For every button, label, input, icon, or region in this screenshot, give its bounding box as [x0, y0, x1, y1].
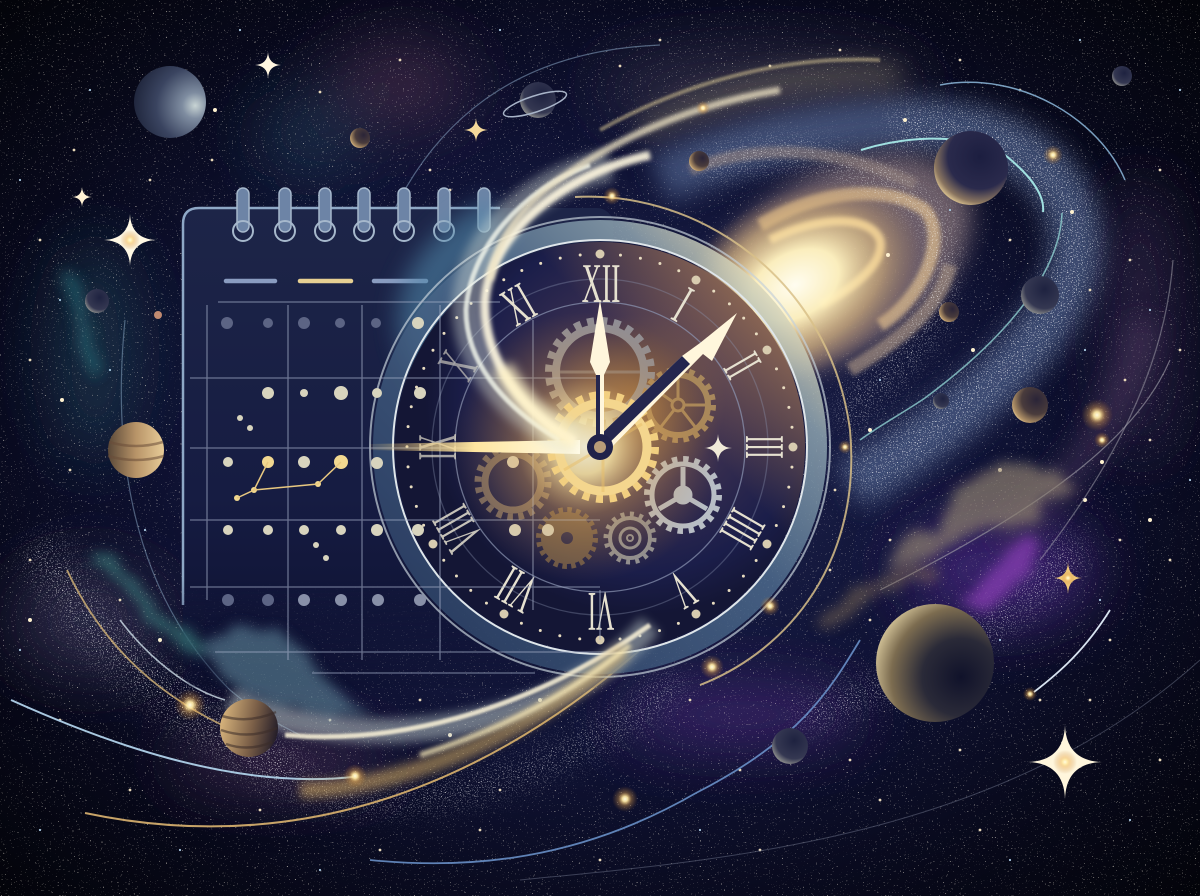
- calendar spiral rings: [233, 188, 490, 241]
- planet: dark gold rimmed upper right: [934, 131, 1008, 205]
- tan and purple clouds lower right: [820, 465, 1075, 630]
- planet: banded tan left: [108, 422, 164, 478]
- clock hub: [587, 434, 613, 460]
- outer blue galaxy arm: [640, 74, 1145, 540]
- roman numerals: X: [426, 341, 489, 390]
- planet: large lower right: [876, 604, 994, 722]
- galaxy inner arms: [690, 152, 950, 370]
- roman numerals: V: [659, 558, 706, 621]
- planets: [85, 66, 1132, 764]
- planet: grey moon top left: [134, 66, 206, 138]
- sparkle stars: [72, 52, 1102, 799]
- clock outer ring: [383, 230, 817, 664]
- lower left sweeping arm: [230, 625, 650, 790]
- gear left faded bronze: [478, 447, 548, 517]
- gold sweep arc: [575, 197, 851, 685]
- roman numerals: XI: [491, 271, 545, 338]
- clock inner rings: [432, 279, 768, 615]
- gear right grey: [647, 459, 719, 531]
- clock hands: [587, 300, 737, 460]
- roman numerals: II: [711, 344, 772, 388]
- roman numerals: III: [733, 435, 794, 459]
- clock face warm light: [395, 242, 805, 652]
- hour hand: [590, 300, 610, 435]
- minute hand: [593, 313, 737, 453]
- galaxy mauve disc: [660, 109, 1010, 421]
- clock face: [395, 242, 805, 652]
- calendar day dots: [221, 317, 554, 606]
- light beam across the calendar: [370, 440, 580, 454]
- planet: ringed saturn: [501, 82, 569, 122]
- blue light behind swirl: [421, 220, 560, 445]
- galaxy core and arms: [633, 109, 1010, 430]
- central golden glow: [450, 312, 720, 582]
- hour dots: [428, 250, 798, 644]
- roman numerals: XII: [582, 253, 620, 315]
- roman numerals: VI: [588, 580, 614, 642]
- glowing points: [174, 101, 1113, 812]
- clock ring highlights: [370, 217, 830, 677]
- gear right bronze: [643, 370, 713, 440]
- roman numerals: IX: [407, 434, 469, 460]
- panel: calendar body: [183, 208, 613, 688]
- calendar: [183, 188, 613, 688]
- gears: [478, 321, 719, 566]
- calendar header dashes: [226, 279, 426, 283]
- gear top: [549, 321, 651, 423]
- swirl of light around the clock: [466, 59, 880, 443]
- teal and slate cloud lower left: [65, 270, 370, 716]
- roman numerals: VII: [487, 554, 548, 625]
- roman numerals: VIII: [422, 495, 495, 561]
- central golden gear: [551, 395, 655, 499]
- roman numerals: IIII: [707, 499, 776, 557]
- galaxy bright center: [633, 140, 957, 430]
- clock: [370, 197, 851, 685]
- roman numerals: I: [663, 275, 702, 334]
- planet: banded brown lower left: [220, 699, 278, 757]
- gear lower small: [606, 514, 654, 562]
- galaxy star dust in the spiral arms: [6, 85, 1118, 832]
- gear bottom bronze: [539, 510, 595, 566]
- calendar grid and dots over the clock: [190, 302, 620, 673]
- roman numerals: [407, 253, 794, 642]
- small planets: [85, 66, 1132, 764]
- minute dots: [407, 254, 793, 640]
- calendar trend line: [237, 462, 341, 498]
- calendar grid: [190, 302, 620, 673]
